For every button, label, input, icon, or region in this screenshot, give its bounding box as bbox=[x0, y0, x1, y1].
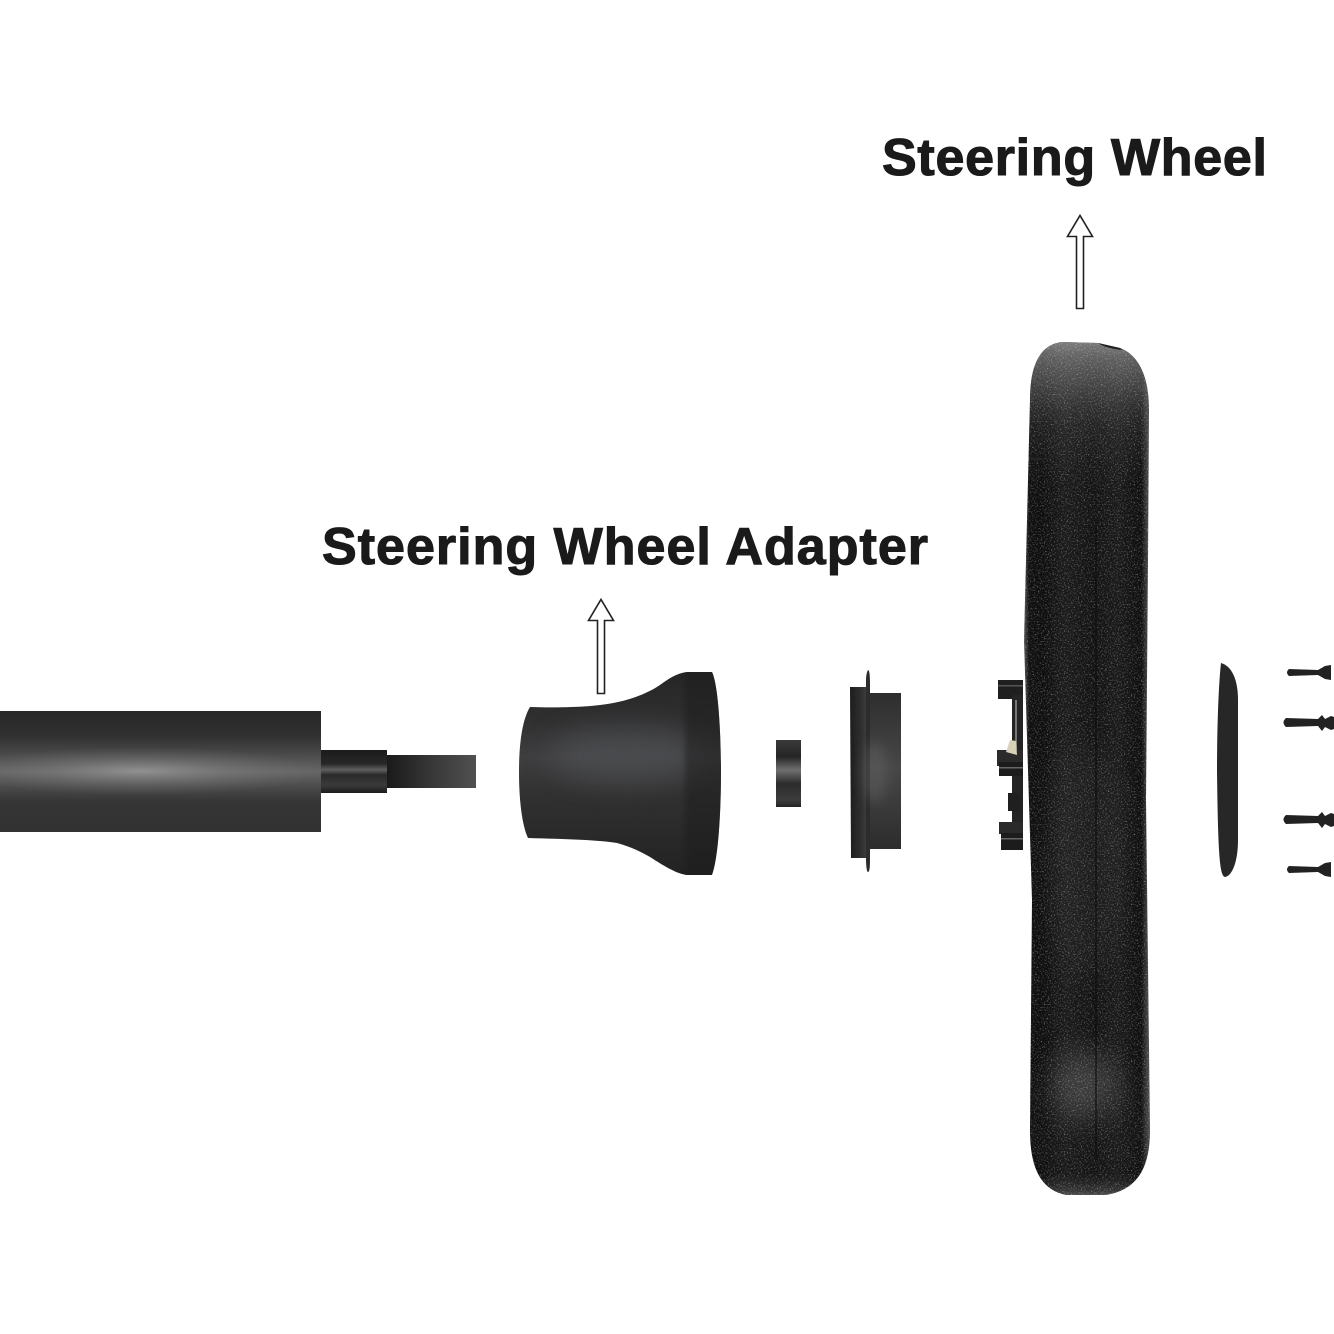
column collar bbox=[321, 750, 387, 793]
arrow: to steering wheel bbox=[1068, 216, 1092, 308]
heading: Steering Wheel: Steering Wheel bbox=[882, 129, 1267, 187]
wheel hub clips bbox=[997, 680, 1023, 850]
spacer ring bbox=[776, 740, 801, 807]
arrow: to adapter bbox=[588, 600, 614, 694]
steering wheel adapter bbox=[515, 668, 725, 880]
screw 3 bbox=[1284, 812, 1334, 828]
heading: Steering Wheel Adapter: Steering Wheel Adapter bbox=[322, 518, 928, 576]
screw 2 bbox=[1284, 715, 1334, 731]
center cover bbox=[1217, 663, 1238, 877]
screw 1 bbox=[1287, 665, 1331, 680]
screw 4 bbox=[1287, 862, 1331, 877]
steering column tube bbox=[0, 711, 325, 832]
notch on wheel top bbox=[1098, 343, 1122, 350]
column shaft bbox=[387, 755, 476, 788]
mounting plate bbox=[850, 670, 901, 872]
steering wheel rim bbox=[1020, 340, 1152, 1198]
